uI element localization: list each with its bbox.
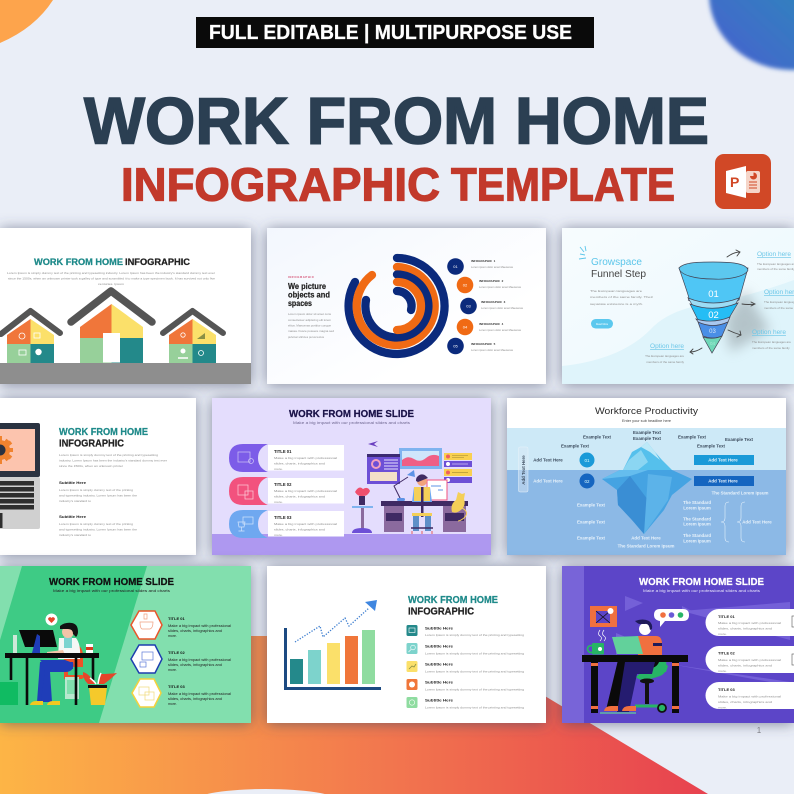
pill item 1: slides, charts, infographics and	[718, 626, 772, 630]
panel: laptop slide	[0, 398, 196, 555]
list item 3: slides, charts, infographics and	[168, 697, 222, 701]
braces	[721, 502, 745, 542]
heading: WORK FROM HOME	[408, 595, 498, 606]
list item 1: Lorem Ipsum is simply dummy text of the printing and typesetting	[425, 633, 524, 637]
option label 1	[757, 251, 794, 271]
chart: funnel	[679, 262, 748, 353]
chart: funnel: 02	[708, 310, 719, 321]
callout labels: The Standard	[683, 533, 711, 538]
heading: WORK FROM HOME SLIDE	[639, 576, 764, 588]
heading: spaces	[288, 299, 313, 308]
list item 4	[457, 319, 521, 335]
list item 3: TITLE 03	[274, 515, 292, 520]
list item 3: Lorem ipsum dolor amet Maecenas	[481, 306, 523, 310]
vertical tab: Add Text Here	[521, 455, 526, 485]
list item 2: slides, charts, infographics and	[274, 494, 325, 498]
chart: funnel: 03	[709, 329, 716, 335]
callout labels: Lorem Ipsum	[683, 522, 711, 526]
list item 4	[406, 679, 524, 692]
text block: Lorem Ipsum is simply dummy text of the printing and typesetting	[59, 453, 158, 457]
callout labels: Example Text	[725, 437, 754, 442]
list item 1: Make a big impact with professional	[274, 456, 337, 460]
list item 2: Make a big impact with professional	[274, 489, 337, 493]
number 01: 01	[584, 458, 590, 463]
option label 3: The European languages are	[752, 340, 791, 344]
list item 1: TITLE 01	[274, 449, 292, 454]
list item 1: Make a big impact with professional	[168, 624, 231, 628]
house: left	[1, 311, 60, 363]
text block: Lorem ipsum dolor sit amet cons	[288, 312, 331, 316]
option label 4: Option here	[650, 343, 684, 350]
text block: since the 1500s, when an unknown printer	[59, 464, 123, 468]
arrows	[690, 250, 755, 354]
wave background	[562, 280, 794, 384]
panel: iceberg slide	[507, 398, 786, 555]
callout labels: Add Text Here	[742, 520, 772, 524]
illustration: desk scene	[352, 441, 472, 534]
list item 1	[447, 258, 513, 275]
subtitle block 2: Lorem Ipsum is simply dummy text of the printing	[59, 522, 133, 526]
heading: objects and	[288, 290, 330, 300]
text block: since the 1500s, when an unknown printer took a galley of type and scrambled it to make a type specimen book. It has survived not only five	[8, 276, 215, 280]
list item 3: Make a big impact with professional	[274, 522, 337, 526]
chart: funnel: 01	[708, 289, 719, 300]
option label 4: members of the same family	[646, 360, 684, 364]
list item 2	[406, 643, 524, 656]
option label 3: Option here	[752, 329, 786, 336]
subtitle block 1: and typesetting industry. Lorem Ipsum has been the	[59, 494, 137, 498]
callout labels: Example Text	[577, 502, 606, 508]
text block: members of the same family. Their	[590, 295, 653, 299]
list item 1: Subtitle Here	[425, 626, 453, 630]
list item 1	[406, 625, 524, 637]
heading: WORK FROM HOME	[34, 257, 123, 267]
heading: INFOGRAPHIC	[125, 257, 191, 267]
callout labels: Example Text	[577, 520, 606, 524]
option label 1: Option here	[757, 251, 791, 258]
pill item 1	[706, 609, 794, 636]
funnel shadow	[725, 290, 770, 352]
sparkle marks	[579, 246, 586, 259]
list item 1: more.	[168, 634, 177, 638]
list item 3: Subtitle Here	[425, 662, 453, 666]
list item 2: TITLE 02	[168, 650, 185, 655]
subtitle block 2: and typesetting industry. Lorem Ipsum has been the	[59, 528, 137, 532]
callout labels: Lorem Ipsum	[683, 506, 711, 510]
list item 1: slides, charts, infographics and	[274, 462, 325, 466]
heading	[591, 257, 646, 280]
heading: Funnel Step	[591, 269, 646, 280]
callout labels: Add Text Here	[533, 458, 563, 462]
background triangles	[616, 596, 790, 682]
text block: elitus. Maecenas porttitor congue	[288, 324, 331, 328]
list item 2: 02	[463, 282, 468, 288]
illustration: laptop	[0, 423, 40, 529]
callout labels: The Standard	[683, 500, 711, 505]
list item 2: Subtitle Here	[425, 644, 453, 648]
list item 3: TITLE 03	[168, 684, 185, 689]
subtitle block 1	[59, 481, 137, 503]
list item 5: Lorem ipsum dolor amet Maecenas	[471, 348, 513, 352]
heading: WORK FROM HOME SLIDE	[289, 408, 414, 420]
text block	[590, 289, 653, 306]
list item 1: INFOGRAPHIC 1	[471, 259, 496, 263]
page number: 1	[757, 726, 762, 735]
option label 2	[764, 289, 794, 310]
heading	[288, 282, 330, 308]
text block: consectetuer adipiscing elit lorem	[288, 318, 331, 322]
title: WORK FROM HOME	[84, 84, 709, 158]
list item 5: Subtitle Here	[425, 698, 453, 702]
panel: green work from home slide	[0, 566, 251, 723]
heading	[408, 595, 498, 618]
illustration: person at desk	[582, 606, 689, 713]
callout labels: The Standard Lorem Ipsum	[618, 544, 675, 548]
callout labels: Add Text Here	[631, 536, 661, 540]
pill item 2: Make a big impact with professional	[718, 658, 781, 662]
diagonal band	[0, 566, 147, 723]
left stripe	[562, 566, 584, 723]
text block: centuries. Ipsum	[98, 282, 125, 286]
list item 4: INFOGRAPHIC 4	[479, 322, 504, 326]
ground	[0, 363, 251, 384]
subheading: Make a big impact with our professional slides and charts	[293, 420, 410, 425]
number 02: 02	[584, 479, 590, 484]
text block: pulvinar ultricies purus lectus	[288, 335, 324, 339]
house: centre	[71, 291, 152, 363]
list item 2	[131, 645, 231, 673]
pill item 3: TITLE 03	[718, 687, 735, 692]
heading: Workforce Productivity	[595, 406, 698, 417]
option label 1: members of the same family	[757, 267, 794, 271]
list item 1: more.	[274, 467, 283, 471]
pill item 2	[706, 646, 794, 673]
callout labels: Example Text	[561, 444, 590, 448]
subtitle block 1: Subtitle Here	[59, 481, 86, 485]
subtitle block 1: industry's standard to	[59, 499, 91, 503]
banner: full editable: FULL EDITABLE | MULTIPURPOSE USE	[209, 22, 572, 44]
pill item 3	[706, 682, 794, 710]
iceberg	[602, 442, 692, 534]
pill item 2: more.	[718, 669, 727, 673]
button 2: Add Text Here	[708, 478, 738, 484]
callout labels: Example Text	[633, 430, 662, 435]
list item 2: Lorem Ipsum is simply dummy text of the printing and typesetting	[425, 652, 524, 656]
button	[591, 319, 613, 328]
list item 3	[229, 510, 344, 538]
list item 2: slides, charts, infographics and	[168, 663, 222, 667]
callout labels: Example Text	[678, 434, 707, 440]
pill item 1: TITLE 01	[718, 614, 735, 619]
subtitle: INFOGRAPHIC	[121, 158, 440, 210]
decorative shape: orange-red gradient at the bottom	[0, 636, 708, 794]
heading: WORK FROM HOME	[59, 427, 148, 438]
list item 2	[457, 277, 521, 293]
panel: funnel slide	[562, 228, 794, 384]
text block: The European languages are	[590, 289, 642, 293]
list item 3: more.	[168, 702, 177, 706]
header band	[507, 398, 786, 428]
option label 3: members of the same family	[752, 346, 790, 350]
list item 3: Make a big impact with professional	[168, 692, 231, 696]
panel: lilac work from home slide	[212, 398, 491, 555]
pill item 1: Make a big impact with professional	[718, 621, 781, 625]
list item 2: more.	[168, 668, 177, 672]
list item 3: INFOGRAPHIC 3	[481, 300, 506, 304]
callout labels: Example Text	[583, 434, 612, 440]
list item 1: 01	[453, 264, 458, 269]
heading: We picture	[288, 282, 327, 291]
illustration: person at desk	[0, 614, 117, 705]
subtitle block 2	[59, 515, 137, 537]
callout labels	[533, 430, 772, 548]
list item 2: Make a big impact with professional	[168, 658, 231, 662]
floor	[212, 534, 491, 555]
list item 3	[132, 679, 231, 707]
list item 1: TITLE 01	[168, 616, 185, 621]
list item 3: slides, charts, infographics and	[274, 528, 325, 532]
list item 3	[460, 298, 523, 314]
pill item 3: more.	[718, 706, 727, 710]
banner: full editable	[196, 17, 594, 48]
text block: Lorem Ipsum is simply dummy text of the printing and typesetting industry. Lorem Ipsum has been the industry's standard dummy text ever	[7, 271, 215, 275]
list item 3: more.	[274, 533, 283, 537]
list item 4: 04	[463, 324, 468, 330]
list item 1	[229, 444, 344, 472]
house: right	[163, 311, 223, 363]
panel: house infographic slide	[0, 228, 251, 384]
button 1	[694, 455, 754, 465]
number 01	[580, 452, 594, 468]
list item 1: slides, charts, infographics and	[168, 629, 222, 633]
eyebrow: INFOGRAPHIC	[288, 275, 314, 279]
list item 4: Lorem ipsum dolor amet Maecenas	[479, 328, 521, 332]
callout labels: The Standard	[683, 516, 711, 522]
list item 5	[447, 338, 513, 354]
text block	[7, 271, 215, 286]
button 1: Add Text Here	[708, 458, 738, 462]
callout labels: Lorem Ipsum	[683, 538, 711, 544]
text block	[288, 312, 334, 339]
list item 2	[229, 477, 344, 505]
number 02	[580, 474, 594, 488]
decorative blob: blue top right	[709, 0, 794, 70]
list item 3: Lorem Ipsum is simply dummy text of the printing and typesetting	[425, 670, 524, 674]
subheading: Make a big impact with our professional slides and charts	[643, 588, 760, 593]
text block: separate existence is a myth.	[590, 302, 643, 306]
panel: concentric rings slide	[267, 228, 546, 384]
subtitle: TEMPLATE	[451, 158, 675, 210]
option label 3	[752, 329, 791, 350]
list item 5: Lorem Ipsum is simply dummy text of the printing and typesetting	[425, 706, 524, 710]
pill item 3: slides, charts, infographics and	[718, 700, 772, 704]
list item 3	[406, 661, 524, 674]
heading: INFOGRAPHIC	[59, 438, 124, 450]
heading: WORK FROM HOME SLIDE	[49, 576, 174, 588]
list item 4: Lorem Ipsum is simply dummy text of the printing and typesetting	[425, 688, 524, 692]
button 2	[694, 476, 754, 486]
list item 2: Lorem ipsum dolor amet Maecenas	[479, 285, 521, 289]
decorative shape: pale ellipse at the bottom edge	[196, 789, 336, 794]
subheading: Enter your sub headline here	[622, 419, 671, 423]
subtitle block 1: Lorem Ipsum is simply dummy text of the printing	[59, 488, 133, 492]
callout labels: Example Text	[633, 436, 662, 441]
list item 2: more.	[274, 500, 283, 504]
subheading: Make a big impact with our professional slides and charts	[53, 588, 170, 593]
sky band	[507, 428, 786, 470]
option label 4	[645, 343, 684, 364]
panel: purple work from home slide	[562, 566, 794, 723]
list item 3: 03	[466, 304, 471, 308]
pill item 1: more.	[718, 632, 727, 636]
callout labels: Add Text Here	[533, 478, 563, 484]
icon: PowerPoint: P	[730, 174, 739, 190]
option label 4: The European languages are	[645, 354, 684, 358]
heading	[34, 257, 191, 267]
list item 2: TITLE 02	[274, 482, 292, 487]
list item 5	[406, 697, 524, 710]
list item 2: INFOGRAPHIC 2	[479, 279, 504, 283]
callout labels: Example Text	[697, 444, 726, 448]
chart: funnel: 04	[710, 341, 715, 346]
heading	[59, 427, 148, 450]
subtitle block 2: industry's standard to	[59, 533, 91, 537]
heading: Growspace	[591, 257, 642, 268]
pill item 3: Make a big impact with professional	[718, 694, 781, 698]
chart: concentric arcs	[349, 258, 445, 354]
panel: bar chart slide	[267, 566, 546, 723]
decorative blob: orange top left	[0, 0, 53, 43]
pill item 2: TITLE 02	[718, 650, 735, 656]
callout labels: Example Text	[577, 536, 606, 540]
list item 4: Subtitle Here	[425, 680, 453, 684]
text block: industry. Lorem Ipsum has been the industry's standard dummy text ever	[59, 458, 167, 462]
list item 5: INFOGRAPHIC 5	[471, 342, 496, 346]
heading: INFOGRAPHIC	[408, 606, 474, 618]
callout labels: The Standard Lorem Ipsum	[712, 490, 769, 496]
list item 1: Lorem ipsum dolor amet Maecenas	[471, 265, 513, 269]
text block: massa. Fusce posuere magna sed	[288, 329, 334, 333]
subtitle block 2: Subtitle Here	[59, 515, 86, 519]
icon: PowerPoint	[715, 154, 771, 209]
list item 5: 05	[453, 344, 458, 348]
text block	[59, 453, 167, 468]
subtitle	[121, 158, 675, 210]
pill item 2: slides, charts, infographics and	[718, 664, 772, 668]
button: Read More	[596, 323, 609, 326]
vertical tab	[518, 447, 528, 492]
list item 1	[131, 611, 231, 639]
bar chart	[286, 600, 381, 688]
